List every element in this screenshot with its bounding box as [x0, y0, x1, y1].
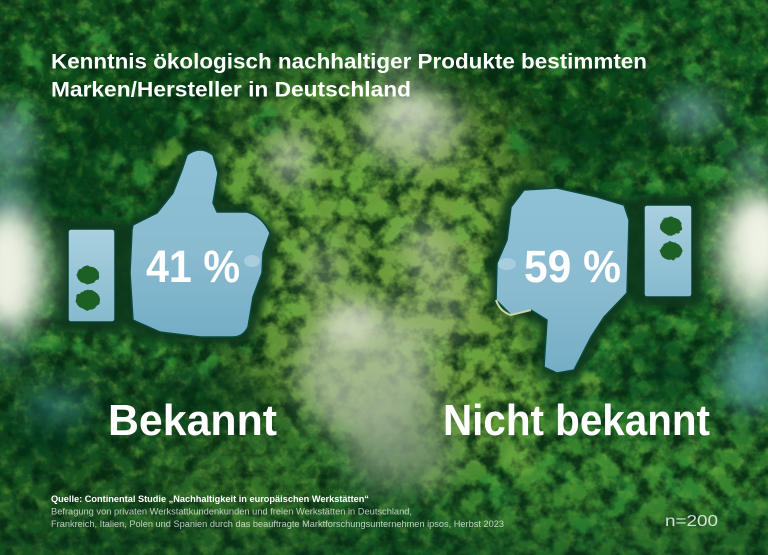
left thumbs-up lake — [130, 150, 270, 337]
source note — [51, 494, 504, 530]
right thumbs-down lake — [496, 188, 629, 373]
title: Marken/Hersteller in Deutschland — [51, 78, 411, 102]
pond islands — [660, 217, 682, 260]
value: 59 %: 59 % — [524, 241, 621, 292]
source note: Quelle: Continental Studie „Nachhaltigkeit in europäischen Werkstätten“ — [51, 494, 369, 505]
value: 41 %: 41 % — [146, 241, 240, 292]
pond islands — [76, 266, 100, 310]
dark forest shadows — [0, 12, 710, 470]
sample size: n=200 — [665, 513, 718, 530]
title: Kenntnis ökologisch nachhaltiger Produkte bestimmten — [51, 50, 647, 74]
title — [51, 50, 647, 102]
dark halo around lakes — [58, 143, 702, 380]
label: Nicht bekannt: Nicht bekannt — [443, 396, 710, 445]
left small rectangular pond — [68, 229, 115, 322]
source note: Befragung von privaten Werkstattkundenkunden und freien Werkstätten in Deutschland, — [51, 506, 412, 518]
source note: Frankreich, Italien, Polen und Spanien durch das beauftragte Marktforschungsunternehmen ipsos, Herbst 2023 — [51, 519, 504, 530]
label: Bekannt: Bekannt — [108, 396, 277, 445]
bottom shade behind source text — [0, 470, 768, 555]
right small rectangular pond — [644, 205, 692, 297]
